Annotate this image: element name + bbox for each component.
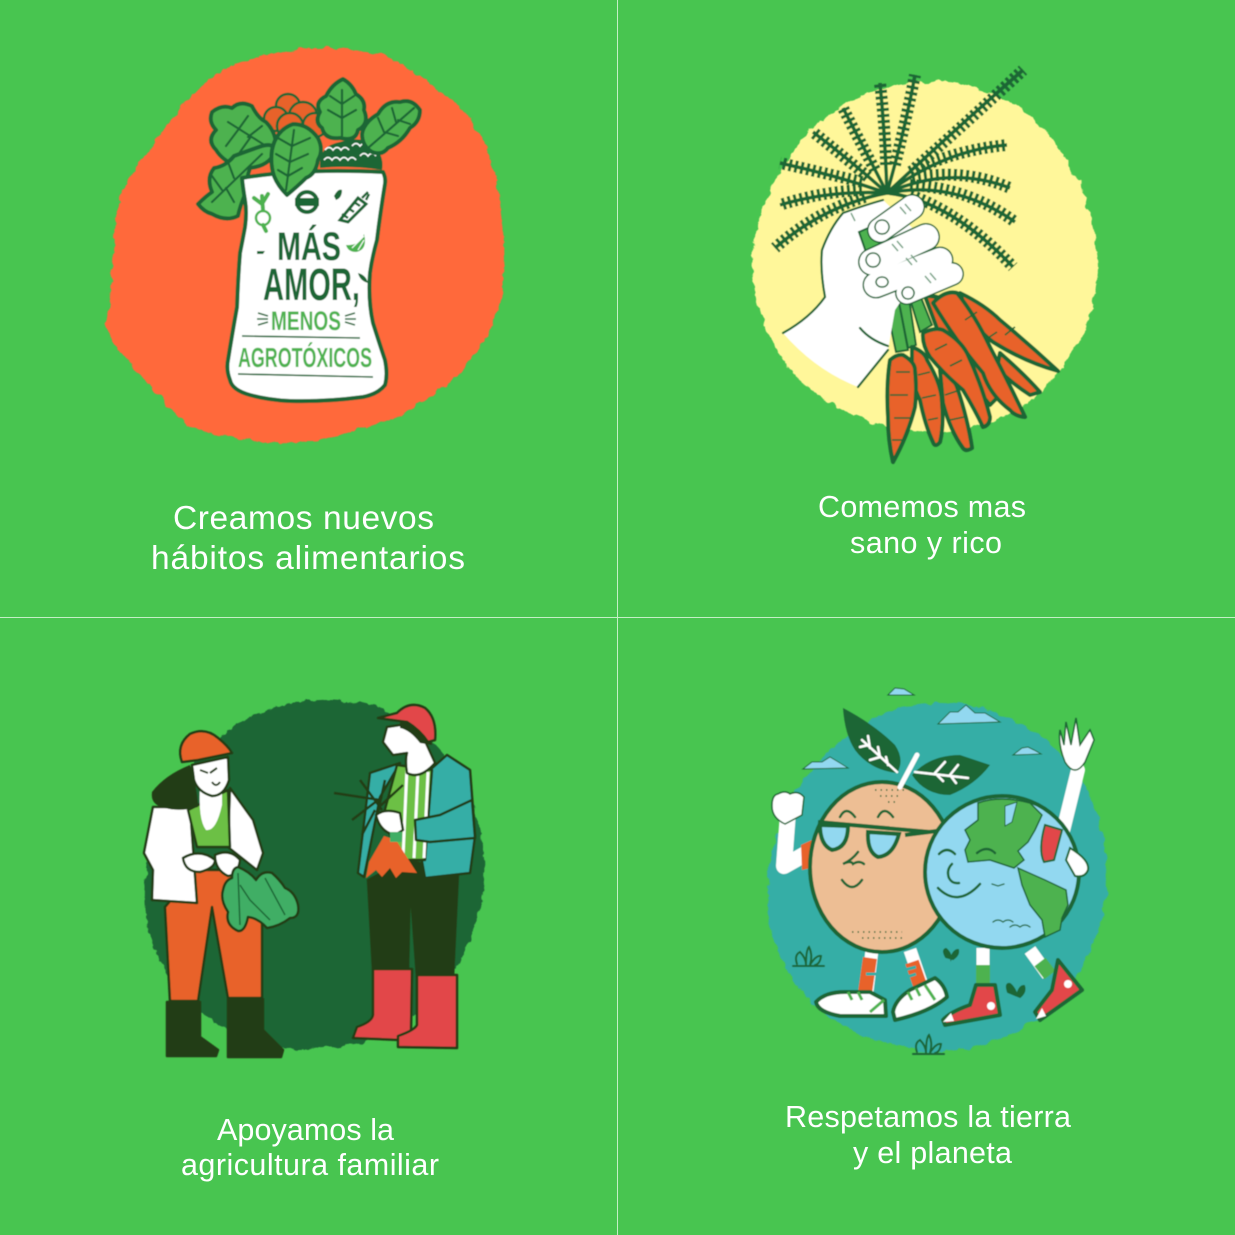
woman face	[192, 757, 229, 796]
panel: comemos mas sano	[752, 70, 1098, 462]
waving arm	[1060, 718, 1094, 835]
man neck and face	[383, 724, 435, 775]
carrot stems	[884, 290, 932, 352]
orange paint blob	[106, 48, 504, 443]
man shirt	[383, 765, 432, 860]
leaf: far right	[362, 101, 420, 153]
man trousers	[368, 860, 458, 977]
orange speckles	[852, 790, 905, 938]
beet bulb	[320, 139, 382, 170]
yellow paint blob	[752, 82, 1098, 432]
caption: comemos	[818, 490, 1026, 560]
caption: respetamos: Respetamos la tierra	[785, 1100, 1071, 1134]
man hair	[400, 720, 432, 745]
leaf: upper left	[211, 103, 276, 166]
bag text: AGROTÓXICOS	[238, 342, 372, 373]
finger creases	[851, 204, 936, 283]
sneakers: red	[943, 960, 1082, 1025]
carrot bunch	[334, 780, 417, 878]
caption: creamos: Creamos nuevos	[173, 500, 434, 537]
caption: comemos: sano y rico	[850, 526, 1002, 560]
globe	[925, 796, 1079, 948]
panel: creamos nuevos hábitos	[106, 48, 504, 443]
woman boots	[167, 999, 283, 1057]
caption: respetamos: y el planeta	[853, 1136, 1012, 1170]
clouds	[803, 688, 1041, 769]
caption: apoyamos	[181, 1113, 439, 1182]
man cap	[378, 705, 435, 742]
dark green paint blob	[145, 700, 484, 1048]
orange character legs	[864, 950, 922, 1000]
woman neck	[200, 785, 222, 830]
icon: radish	[254, 194, 270, 231]
man arm and hand	[376, 800, 475, 842]
caption: respetamos	[785, 1100, 1071, 1170]
caption: creamos	[151, 500, 465, 577]
leaf: lower left	[198, 145, 274, 219]
caption: comemos: Comemos mas	[818, 490, 1026, 524]
bag badge	[295, 190, 319, 214]
teal paint blob	[768, 703, 1106, 1051]
woman hair	[152, 765, 198, 810]
bag text	[238, 224, 372, 373]
orange arm and fist	[772, 792, 812, 870]
woman tank top	[188, 790, 230, 847]
bag text: AMOR,	[263, 259, 360, 310]
globe character legs	[983, 948, 1050, 985]
sunglasses	[818, 822, 945, 857]
stem held in fist	[859, 225, 882, 258]
panel: respetamos la tierra	[768, 688, 1106, 1054]
man	[334, 705, 475, 1048]
icon: lime slice	[346, 234, 365, 252]
tomatoes	[264, 94, 327, 139]
caption: apoyamos: Apoyamos la	[217, 1113, 394, 1147]
man jacket	[358, 755, 475, 878]
caption: apoyamos: agricultura familiar	[181, 1148, 439, 1182]
man boots	[353, 969, 457, 1048]
leaf: top right	[317, 79, 366, 139]
caption: creamos: hábitos alimentarios	[151, 540, 465, 577]
fingernails	[866, 220, 914, 299]
stem and leaves	[843, 708, 990, 795]
carrots	[887, 292, 1058, 462]
grass tufts	[793, 947, 1024, 1054]
icon: carrot	[340, 192, 369, 222]
continents	[965, 799, 1068, 937]
woman	[144, 731, 298, 1057]
bag	[227, 124, 386, 401]
sneakers: white	[816, 978, 947, 1020]
carrot fronds	[775, 70, 1023, 267]
leafy greens	[222, 867, 298, 931]
woman hands	[183, 852, 240, 876]
globe face	[938, 849, 1030, 927]
orange face	[840, 811, 893, 887]
woman jacket	[144, 788, 263, 903]
leaf: center over bag	[271, 124, 321, 195]
carrot ridges	[890, 312, 1015, 440]
bag text: MENOS	[271, 306, 341, 336]
panel: agricultura familiar	[144, 700, 484, 1057]
woman cap	[180, 731, 232, 762]
fingers	[872, 207, 952, 293]
hand	[783, 200, 952, 387]
seeds	[257, 190, 368, 283]
lake	[1005, 802, 1017, 826]
orange body	[810, 782, 954, 952]
woman trousers	[165, 870, 262, 1001]
hugging arm	[1041, 825, 1088, 876]
bag text: MÁS	[277, 224, 341, 269]
